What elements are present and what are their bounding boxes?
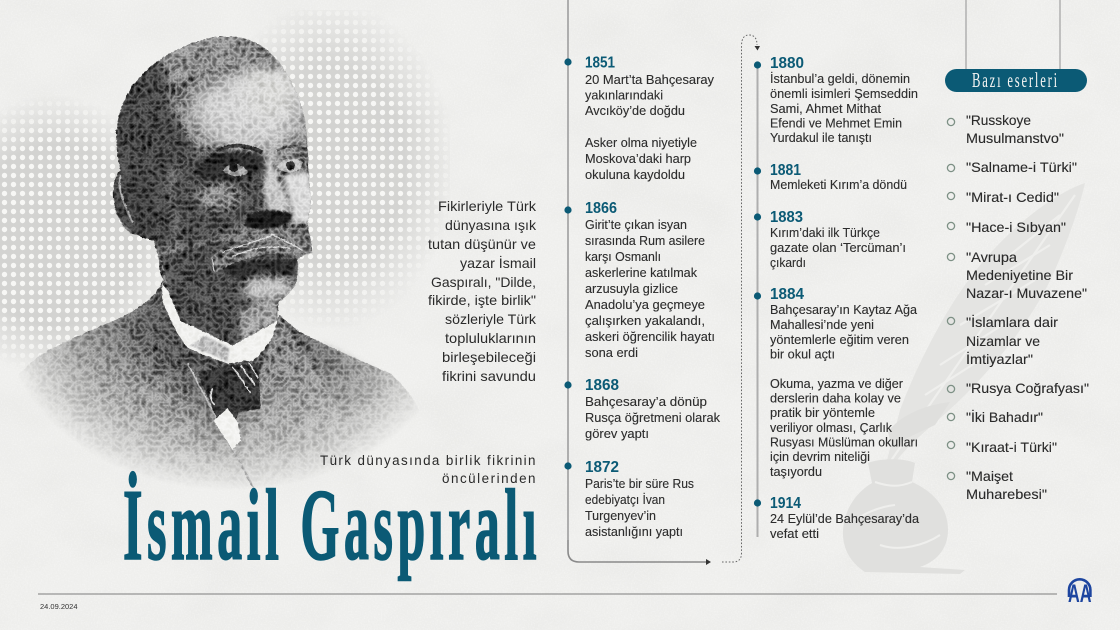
entry 1872: Paris’te bir süre Rus <box>585 477 694 491</box>
entry 1880: Yurdakul ile tanıştı <box>770 131 872 145</box>
entry 1884: yöntemlerle eğitim veren <box>770 333 909 347</box>
eyes <box>222 164 248 176</box>
intro text <box>428 199 536 384</box>
moustache <box>210 227 312 272</box>
list item: İslamlara dair Nizamlar ve İmtiyazlar: İmtiyazlar" <box>966 352 1033 367</box>
portrait of İsmail Gaspıralı <box>24 36 416 488</box>
icon: AA logo: AA <box>1068 580 1092 608</box>
entry 1881 <box>754 162 907 192</box>
entry 1884: için devrim niteliği <box>770 450 870 464</box>
entry 1866: çalışırken yakalandı, <box>585 314 705 328</box>
list item: Rusya Coğrafyası: "Rusya Coğrafyası" <box>966 381 1089 396</box>
entry 1884: Okuma, yazma ve diğer <box>770 377 903 391</box>
entry 1851: Moskova’daki harp <box>585 152 691 166</box>
entry 1914 <box>754 495 919 541</box>
entry 1883: Kırım’daki ilk Türkçe <box>770 226 880 240</box>
shirt front <box>213 408 240 449</box>
entry 1851: Avcıköy’de doğdu <box>585 104 685 118</box>
entry 1881: Memleketi Kırım’a döndü <box>770 178 907 192</box>
list item: Avrupa Medeniyetine Bir Nazar-ı Muvazene: Medeniyetine Bir <box>966 268 1073 283</box>
subtitle <box>320 453 536 486</box>
entry 1868: 1868 <box>585 377 619 394</box>
entry 1868: Bahçesaray’a dönüp <box>585 395 707 409</box>
inkwell and feather watermark <box>843 183 1085 574</box>
entry 1851: okuluna kaydoldu <box>585 168 685 182</box>
entry 1884: taşıyordu <box>770 465 822 479</box>
intro text: tutan düşünür ve <box>428 237 536 252</box>
entry 1914: 1914 <box>770 495 801 512</box>
entry 1851 <box>564 54 715 182</box>
text: İsmail Gaspıralı <box>123 469 541 582</box>
entry 1866: Girit’te çıkan isyan <box>585 218 687 232</box>
entry 1866: karşı Osmanlı <box>585 250 661 264</box>
list item: Russkoye Musulmanstvo: "Russkoye <box>966 113 1031 128</box>
entry 1868 <box>564 377 721 441</box>
list item: Avrupa Medeniyetine Bir Nazar-ı Muvazene: Nazar-ı Muvazene" <box>966 286 1087 301</box>
entry 1866: Anadolu’ya geçmeye <box>585 298 705 312</box>
entry 1851: 1851 <box>585 54 615 72</box>
entry 1868: görev yaptı <box>585 427 649 441</box>
list item: Maişet Muharebesi: Muharebesi" <box>966 487 1047 502</box>
neck <box>160 260 278 342</box>
footer rule <box>38 593 1057 595</box>
entry 1883: 1883 <box>770 209 803 226</box>
entry 1883: çıkardı <box>770 256 806 270</box>
entry 1880: Sami, Ahmet Mithat <box>770 102 882 116</box>
entry 1872: Turgenyev’in <box>585 509 656 523</box>
list item: Avrupa Medeniyetine Bir Nazar-ı Muvazene: "Avrupa <box>966 250 1017 265</box>
entry 1884: Bahçesaray’ın Kaytaz Ağa <box>770 303 917 317</box>
entry 1914: 24 Eylül’de Bahçesaray’da <box>770 512 919 526</box>
entry 1872: 1872 <box>585 459 619 476</box>
entry 1884 <box>754 286 918 479</box>
list item: Maişet Muharebesi <box>947 469 1047 502</box>
panel: works list heading pill: Bazı eserleri <box>972 68 1059 92</box>
icon: AA logo <box>1068 579 1092 608</box>
lapel line <box>187 363 253 487</box>
list item: Salname-i Türki: "Salname-i Türki" <box>966 160 1077 175</box>
entry 1880: 1880 <box>770 55 804 72</box>
list item: İslamlara dair Nizamlar ve İmtiyazlar: Nizamlar ve <box>966 334 1040 349</box>
ear <box>113 171 155 238</box>
entry 1880: önemli isimleri Şemseddin <box>770 87 918 101</box>
list item: Russkoye Musulmanstvo <box>947 113 1064 146</box>
intro text: birleşebileceği <box>442 350 536 365</box>
entry 1880: İstanbul’a geldi, dönemin <box>770 72 910 86</box>
entry 1851: Asker olma niyetiyle <box>585 136 697 150</box>
list item: Maişet Muharebesi: "Maişet <box>966 469 1013 484</box>
entry 1872 <box>564 459 694 539</box>
list item: İslamlara dair Nizamlar ve İmtiyazlar: "İslamlara dair <box>966 315 1058 330</box>
entry 1884: 1884 <box>770 286 804 303</box>
list item: Mirat-ı Cedid: "Mirat-ı Cedid" <box>966 190 1059 205</box>
entry 1881: 1881 <box>770 162 801 179</box>
entry 1866: arzusuyla gizlice <box>585 282 678 296</box>
timeline connector arrows <box>568 0 760 565</box>
entry 1866: sona erdi <box>585 346 638 360</box>
entry 1884: Rusyası Müslüman okulları <box>770 436 918 450</box>
list item: İki Bahadır: "İki Bahadır" <box>966 410 1043 425</box>
halftone dot field <box>0 18 442 360</box>
list item: Russkoye Musulmanstvo: Musulmanstvo" <box>966 131 1064 146</box>
list item: Kıraat-i Türki: "Kıraat-i Türki" <box>966 440 1057 455</box>
intro text: Fikirleriyle Türk <box>438 199 536 214</box>
list item: Avrupa Medeniyetine Bir Nazar-ı Muvazene <box>947 250 1087 301</box>
entry 1868: Rusça öğretmeni olarak <box>585 411 721 425</box>
entry 1914: vefat etti <box>770 527 819 541</box>
entry 1872: edebiyatçı İvan <box>585 493 665 507</box>
subtitle: Türk dünyasında birlik fikrinin <box>320 453 536 468</box>
entry 1866: askerlerine katılmak <box>585 266 698 280</box>
intro text: fikirde, işte birlik" <box>428 293 536 308</box>
subtitle: öncülerinden <box>442 471 536 486</box>
entry 1866: 1866 <box>585 200 617 217</box>
bow tie <box>197 362 260 438</box>
intro text: dünyasına ışık <box>445 218 536 233</box>
jacket <box>24 280 416 486</box>
entry 1880 <box>754 55 918 145</box>
entry 1883 <box>754 209 906 270</box>
intro text: topluluklarının <box>445 331 536 346</box>
entry 1866: askeri öğrencilik hayatı <box>585 330 715 344</box>
timeline column 2 <box>754 55 919 541</box>
entry 1880: Efendi ve Mehmet Emin <box>770 116 902 130</box>
head <box>112 36 312 346</box>
entry 1884: veriliyor olması, Çarlık <box>770 421 893 435</box>
intro text: Gaspıralı, "Dilde, <box>431 275 536 290</box>
entry 1884: pratik bir yöntemle <box>770 406 875 420</box>
intro text: fikrini savundu <box>442 369 536 384</box>
entry 1884: bir okul açtı <box>770 348 835 362</box>
entry 1866 <box>564 200 715 360</box>
entry 1866: sırasında Rum asilere <box>585 234 705 248</box>
entry 1883: gazate olan ‘Tercüman’ı <box>770 241 906 255</box>
timeline column 1 <box>564 54 721 539</box>
entry 1884: derslerin daha kolay ve <box>770 392 901 406</box>
date: 24.09.2024 <box>40 602 78 611</box>
list item: Hace-i Sıbyan: "Hace-i Sıbyan" <box>966 220 1066 235</box>
entry 1851: yakınlarındaki <box>585 88 663 102</box>
intro text: yazar İsmail <box>460 256 536 271</box>
entry 1872: asistanlığını yaptı <box>585 525 683 539</box>
panel: works list heading pill <box>945 0 1087 92</box>
list item: İslamlara dair Nizamlar ve İmtiyazlar <box>947 315 1058 367</box>
intro text: sözleriyle Türk <box>445 312 536 327</box>
entry 1851: 20 Mart’ta Bahçesaray <box>585 73 715 87</box>
panel: works list <box>947 113 1089 502</box>
entry 1884: Mahallesi’nde yeni <box>770 318 874 332</box>
shirt collar <box>162 283 278 363</box>
